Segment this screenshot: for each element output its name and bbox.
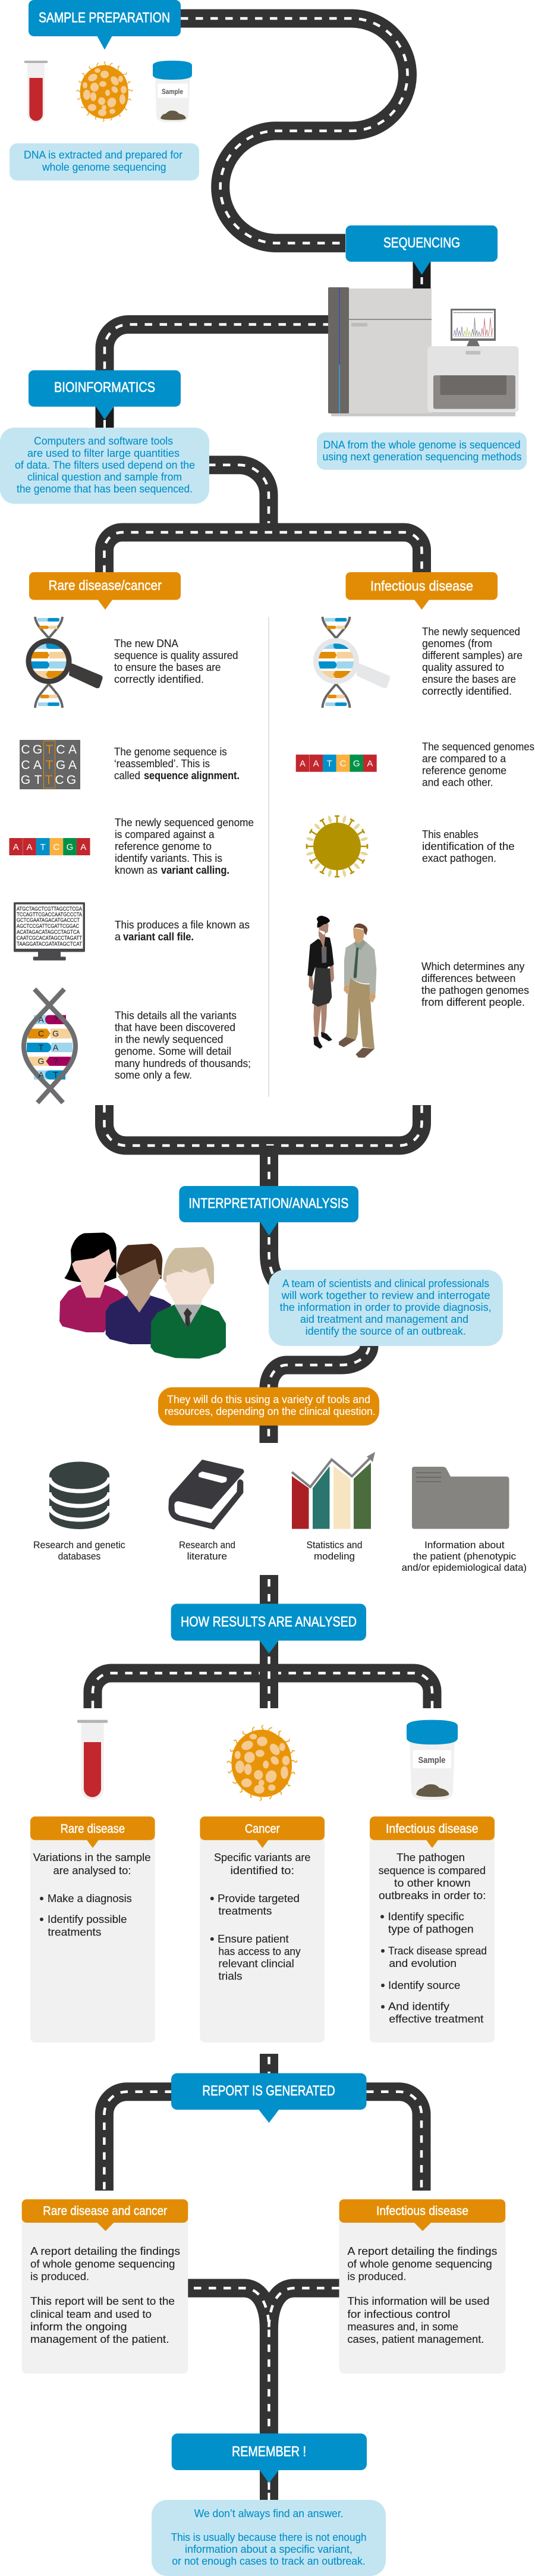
icon: base strip left: C (53, 842, 59, 852)
panel: infectious disease analysis: Identify specific (388, 1910, 464, 1922)
icon: sequence alignment grid (20, 740, 80, 789)
caption: statistics and modeling (307, 1540, 363, 1562)
icon: sequencing machine (328, 287, 518, 416)
icon: blood test tube (24, 61, 48, 123)
panel: cancer analysis: treatments (218, 1905, 272, 1917)
panel: infectious disease analysis: type of pathogen (388, 1924, 474, 1935)
text box: we don't always find an answer: or not enough cases to track an outbreak. (172, 2555, 366, 2567)
icon: sequence alignment grid: A (68, 758, 77, 772)
heading: sequencing: SEQUENCING (383, 235, 460, 251)
text: newly sequenced genomes quality assured: different samples) are (422, 650, 523, 661)
caption: information about the patient: and/or epidemiological data) (402, 1562, 527, 1573)
caption: research and literature: literature (187, 1551, 227, 1562)
text: identification of the pathogen: exact pathogen. (422, 852, 496, 864)
panel: rare disease and cancer report: clinical team and used to (30, 2308, 152, 2320)
heading: sequencing (346, 225, 498, 275)
road: sequencing down to machine (413, 262, 430, 289)
icon: base strip left: A (26, 842, 33, 852)
text: details all the variants: that have been discovered (115, 1022, 235, 1034)
panel: rare disease and cancer report: A report detailing the findings (30, 2245, 180, 2257)
road: merge to interpretation (105, 1105, 422, 1187)
panel: infectious disease report: A report detailing the findings (347, 2245, 497, 2257)
panel: rare disease and cancer report: is produced. (30, 2271, 89, 2283)
text: variant calling: known as (115, 864, 158, 876)
panel: infectious disease report: cases, patient management. (347, 2333, 484, 2345)
panel: infectious disease analysis: sequence is compared (379, 1865, 486, 1877)
icon: base strip left: T (40, 842, 46, 852)
icon: base strip right: T (327, 759, 332, 769)
panel: rare disease analysis: are analysed to: (54, 1865, 131, 1877)
caption: statistics and modeling: modeling (314, 1551, 355, 1562)
panel: infectious disease report: of whole genome sequencing (347, 2258, 492, 2270)
text box: tools and resources: They will do this using a variety of tools and (167, 1394, 370, 1405)
icon: base strip left: G (67, 842, 73, 852)
caption: information about the patient: the patient (phenotypic (413, 1551, 516, 1562)
heading: infectious disease: Infectious disease (370, 578, 473, 594)
icon: sequence alignment grid: T (46, 758, 54, 772)
icon: DNA with variants: A (53, 1043, 59, 1052)
text box: team of scientists: the information in order to provide diagnosis, (280, 1301, 492, 1313)
text box: computers and software tools: the genome that has been sequenced. (17, 483, 193, 495)
heading: sample preparation (29, 0, 181, 50)
panel: rare disease analysis: Variations in the sample (33, 1852, 151, 1863)
heading: bioinformatics (29, 370, 181, 420)
text box: computers and software tools: are used to filter large quantities (27, 447, 180, 459)
panel: infectious disease report: This information will be used (347, 2295, 489, 2307)
text box: DNA is extracted: DNA is extracted and prepared for (24, 149, 182, 161)
icon: monitor with variant call file: ACATAGACATAGCCTAGTCA (17, 929, 80, 936)
icon: sequence alignment grid: A (68, 743, 77, 757)
text: details all the variants: in the newly sequenced (115, 1034, 224, 1046)
road: bioinformatics branch to split (208, 465, 269, 532)
icon: DNA under dark magnifier (29, 617, 103, 708)
caption: research and literature (179, 1540, 235, 1562)
panel: cancer analysis: Ensure patient (218, 1933, 289, 1945)
text: variant calling: The newly sequenced genome (115, 817, 254, 829)
icon: DNA with variants: G (52, 1029, 59, 1038)
panel: infectious disease report (339, 2200, 505, 2374)
text: variant call file: variant call file. (123, 931, 194, 943)
text: newly sequenced genomes quality assured: The newly sequenced (422, 626, 520, 638)
icon: monitor with variant call file: TAAGGATACGATATAGCTCAT (17, 941, 82, 947)
icon: DNA with variants: ? (54, 1056, 58, 1066)
panel: cancer analysis: Cancer (245, 1822, 280, 1835)
text: newly sequenced genomes quality assured (422, 626, 523, 697)
text: variant call file: This produces a file known as (115, 919, 250, 931)
text: details all the variants: many hundreds of thousands; (115, 1058, 251, 1069)
text box: DNA from the whole genome: using next generation sequencing methods (322, 451, 522, 463)
text: sequence alignment (114, 746, 240, 782)
panel: infectious disease analysis: Infectious disease (386, 1822, 479, 1835)
road: analysis boxes to report (260, 2054, 278, 2074)
heading: how results are analysed (171, 1604, 366, 1653)
icon: sequence alignment grid: G (33, 743, 42, 757)
heading: interpretation/analysis: INTERPRETATION/ANALYSIS (188, 1196, 348, 1212)
caption: research and literature: Research and (179, 1540, 235, 1551)
road: interpretation to tools (269, 1222, 369, 1443)
text: newly sequenced genomes quality assured: ensure the bases are (422, 673, 516, 685)
heading: remember: REMEMBER ! (232, 2443, 306, 2459)
text box: tools and resources (158, 1387, 379, 1426)
icon: sequence alignment grid: T (34, 773, 42, 787)
icon: DNA with variants: A (38, 1070, 44, 1080)
icon: team of professionals (59, 1232, 226, 1358)
icon: sequence alignment grid: T (46, 743, 54, 757)
panel: cancer analysis: Provide targeted (218, 1893, 300, 1904)
panel: rare disease and cancer report: inform the ongoing (30, 2321, 127, 2333)
text: variant calling: is compared against a (115, 829, 215, 840)
icon: base strip right: A (300, 759, 306, 769)
text: sequenced genomes compared (422, 741, 534, 789)
icon: DNA with variants (24, 989, 75, 1103)
icon: book (168, 1460, 244, 1530)
icon: base strip left: A (80, 842, 86, 852)
text box: computers and software tools: of data. The filters used depend on the (15, 459, 195, 471)
text box: DNA from the whole genome: DNA from the whole genome is sequenced (323, 439, 521, 451)
panel: infectious disease analysis: Identify source (388, 1979, 460, 1991)
icon: patient folder (412, 1467, 509, 1529)
text: determines differences: the pathogen genomes (421, 984, 529, 996)
panel: rare disease analysis: Rare disease (61, 1822, 125, 1835)
text: details all the variants: This details all the variants (115, 1010, 237, 1022)
road: sample preparation to sequencing (181, 18, 408, 243)
panel: infectious disease analysis: and evolution (389, 1957, 457, 1969)
text: determines differences: differences between (421, 972, 515, 984)
text box: we don't always find an answer: information about a specific variant, (185, 2543, 353, 2555)
icon: sample jar: Sample (162, 89, 183, 96)
icon: sequence alignment grid: C (21, 758, 30, 772)
panel: cancer analysis (200, 1816, 325, 2042)
panel: infectious disease analysis: Track disease spread (388, 1945, 487, 1957)
icon: monitor with variant call file (14, 902, 85, 961)
heading: infectious disease (346, 572, 498, 610)
text: variant call file: a (115, 931, 121, 943)
icon: base strip left: A (13, 842, 19, 852)
caption: statistics and modeling: Statistics and (307, 1540, 363, 1551)
text box: computers and software tools (0, 428, 209, 504)
text: newly sequenced genomes quality assured: quality assured to (422, 661, 504, 673)
icon: tumour sample large (227, 1725, 297, 1800)
road: three-way split after how results are analysed (93, 1640, 432, 1708)
icon: DNA with variants: T (39, 1043, 44, 1052)
icon: sequence alignment grid: C (56, 743, 65, 757)
icon: DNA with variants: T (53, 1070, 58, 1080)
icon: DNA with variants: ? (54, 1015, 58, 1024)
icon: sequence alignment grid: A (33, 758, 42, 772)
panel: rare disease and cancer report: of whole genome sequencing (30, 2258, 175, 2270)
icon: DNA with variants: A (38, 1015, 44, 1024)
road: report branches (104, 2092, 421, 2191)
caption: research and genetic databases: databases (58, 1551, 100, 1562)
icon: sequence alignment grid: T (45, 773, 53, 787)
text box: computers and software tools: clinical question and sample from (27, 471, 182, 483)
road: bioinformatics to text box (95, 406, 114, 428)
text box: we don't always find an answer: This is usually because there is not enough (171, 2531, 367, 2543)
text: variant calling: variant calling. (161, 864, 229, 876)
panel: infectious disease analysis (370, 1816, 495, 2042)
text box: DNA from the whole genome (317, 432, 527, 470)
text: sequenced genomes compared: reference genome (422, 765, 506, 777)
text: sequence alignment: called (114, 770, 140, 782)
text: sequence alignment: sequence alignment. (144, 770, 240, 782)
text: new DNA sequence quality assured: sequence is quality assured (114, 650, 238, 661)
icon: base strip right: A (313, 759, 319, 769)
icon: blood test tube large (77, 1720, 108, 1800)
text: details all the variants (115, 1010, 251, 1081)
panel: infectious disease report: is produced. (347, 2271, 406, 2283)
text box: DNA is extracted: whole genome sequencing (42, 161, 166, 173)
icon: virus (305, 814, 369, 878)
icon: monitor with variant call file: ATGCTAGCTCGTTAGCCTCGA (17, 906, 82, 912)
panel: cancer analysis: Specific variants are (214, 1852, 310, 1863)
icon: sample jar large (407, 1720, 458, 1800)
text box: team of scientists: A team of scientists and clinical professionals (282, 1278, 489, 1289)
text: determines differences (421, 961, 529, 1008)
heading: rare disease/cancer (29, 572, 181, 610)
text: new DNA sequence quality assured: to ensure the bases are (114, 661, 221, 673)
icon: base strip left (10, 838, 90, 855)
heading: report is generated (171, 2073, 366, 2123)
text box: team of scientists (269, 1270, 503, 1346)
panel: infectious disease report: measures and, in some (347, 2321, 458, 2333)
icon: sample jar large: Sample (418, 1756, 446, 1765)
icon: monitor with variant call file: TCCAGTTCGACCAATGCCCTA (17, 911, 82, 918)
road: sequencing machine to bioinformatics (105, 325, 331, 371)
text: variant calling: reference genome to (115, 840, 212, 852)
text: new DNA sequence quality assured: correctly identified. (114, 673, 204, 685)
heading: rare disease/cancer: Rare disease/cancer (49, 578, 162, 593)
icon: base strip right: G (353, 759, 360, 769)
panel: rare disease and cancer report (22, 2200, 188, 2374)
panel: infectious disease analysis: to other known (394, 1877, 471, 1889)
caption: information about the patient: Information about (424, 1540, 505, 1551)
text: determines differences: from different people. (421, 996, 525, 1008)
icon: monitor with variant call file: GCTCGAATAGACATGACCCT (17, 917, 80, 924)
text: new DNA sequence quality assured (114, 638, 238, 685)
text box: we don't always find an answer: We don’t always find an answer. (194, 2508, 344, 2519)
icon: tumour sample (77, 62, 133, 121)
panel: rare disease and cancer report: management of the patient. (30, 2333, 169, 2345)
panel: rare disease analysis (30, 1816, 155, 2042)
heading: interpretation/analysis (179, 1186, 358, 1236)
text: determines differences: Which determines any (421, 961, 524, 972)
text: variant call file (115, 919, 250, 943)
panel: rare disease and cancer report: Rare disease and cancer (43, 2204, 167, 2218)
text: sequenced genomes compared: and each other. (422, 777, 493, 789)
text box: tools and resources: resources, depending on the clinical question. (165, 1405, 376, 1417)
text box: team of scientists: aid treatment and management and (300, 1313, 468, 1325)
icon: monitor with variant call file: CAATCGCACATAGCCTAGATT (17, 935, 82, 942)
text: newly sequenced genomes quality assured: correctly identified. (422, 685, 512, 697)
icon: sample jar (153, 61, 192, 123)
panel: infectious disease analysis: effective treatment (389, 2013, 483, 2025)
icon: base strip right (296, 755, 377, 772)
panel: cancer analysis: trials (218, 1971, 243, 1982)
text box: team of scientists: will work together to review and interrogate (281, 1289, 490, 1301)
road: split to rare disease and infectious disease (105, 532, 422, 573)
text box: team of scientists: identify the source of an outbreak. (306, 1325, 466, 1337)
icon: base strip right: C (340, 759, 347, 769)
panel: infectious disease report: Infectious disease (376, 2204, 468, 2218)
text box: computers and software tools: Computers and software tools (34, 435, 173, 447)
icon: monitor with variant call file: AGCTCCGATTCGATTCGGAC (17, 923, 79, 930)
road: tools to how results are analysed (260, 1575, 278, 1605)
text: new DNA sequence quality assured: The new DNA (114, 638, 178, 650)
icon: sequence alignment grid: C (55, 773, 64, 787)
text: sequence alignment: The genome sequence is (114, 746, 227, 758)
panel: infectious disease analysis: And identify (388, 2001, 449, 2013)
panel: cancer analysis: has access to any (218, 1946, 301, 1957)
text: sequenced genomes compared: are compared to a (422, 753, 506, 765)
heading: remember (172, 2433, 367, 2483)
icon: two people standing (307, 916, 376, 1058)
panel: rare disease analysis: Make a diagnosis (48, 1893, 132, 1904)
heading: report is generated: REPORT IS GENERATED (202, 2083, 335, 2099)
icon: DNA with variants: C (38, 1029, 44, 1038)
caption: research and genetic databases (33, 1540, 125, 1562)
panel: cancer analysis: relevant clincial (218, 1958, 294, 1970)
text: newly sequenced genomes quality assured: genomes (from (422, 638, 492, 650)
panel: rare disease and cancer report: This report will be sent to the (30, 2295, 175, 2307)
text: sequence alignment: ‘reassembled’. This is (114, 758, 210, 770)
icon: statistics chart (292, 1452, 375, 1529)
panel: infectious disease analysis: The pathogen (396, 1852, 465, 1863)
icon: sequence alignment grid: C (21, 743, 30, 757)
text: variant calling (115, 817, 254, 876)
heading: how results are analysed: HOW RESULTS ARE ANALYSED (181, 1614, 357, 1630)
text: identification of the pathogen: identification of the (422, 840, 515, 852)
icon: DNA with variants: G (38, 1056, 44, 1066)
road: remember to final note (260, 2470, 278, 2500)
text box: we don't always find an answer (152, 2500, 386, 2576)
text: details all the variants: genome. Some will detail (115, 1046, 231, 1058)
text: variant calling: identify variants. This is (115, 852, 222, 864)
icon: sequence alignment grid: G (21, 773, 30, 787)
icon: DNA under light magnifier (316, 617, 390, 708)
caption: research and genetic databases: Research and genetic (33, 1540, 125, 1551)
panel: infectious disease analysis: outbreaks in order to: (379, 1890, 486, 1902)
heading: bioinformatics: BIOINFORMATICS (54, 379, 155, 396)
panel: infectious disease report: for infectious control (347, 2308, 450, 2320)
text: details all the variants: some only a few. (115, 1069, 192, 1081)
heading: sample preparation: SAMPLE PREPARATION (39, 10, 170, 26)
panel: rare disease analysis: treatments (48, 1926, 101, 1938)
text: identification of the pathogen (422, 829, 515, 864)
icon: sequence alignment grid: G (67, 773, 76, 787)
road: report boxes merge to remember (188, 2288, 339, 2434)
icon: base strip right: A (367, 759, 373, 769)
icon: sequence alignment grid: G (56, 758, 65, 772)
text: identification of the pathogen: This enables (422, 829, 479, 840)
caption: information about the patient (402, 1540, 527, 1573)
icon: database (49, 1462, 109, 1529)
text box: DNA is extracted (10, 143, 199, 181)
panel: cancer analysis: identified to: (231, 1865, 294, 1877)
panel: rare disease analysis: Identify possible (48, 1913, 127, 1925)
